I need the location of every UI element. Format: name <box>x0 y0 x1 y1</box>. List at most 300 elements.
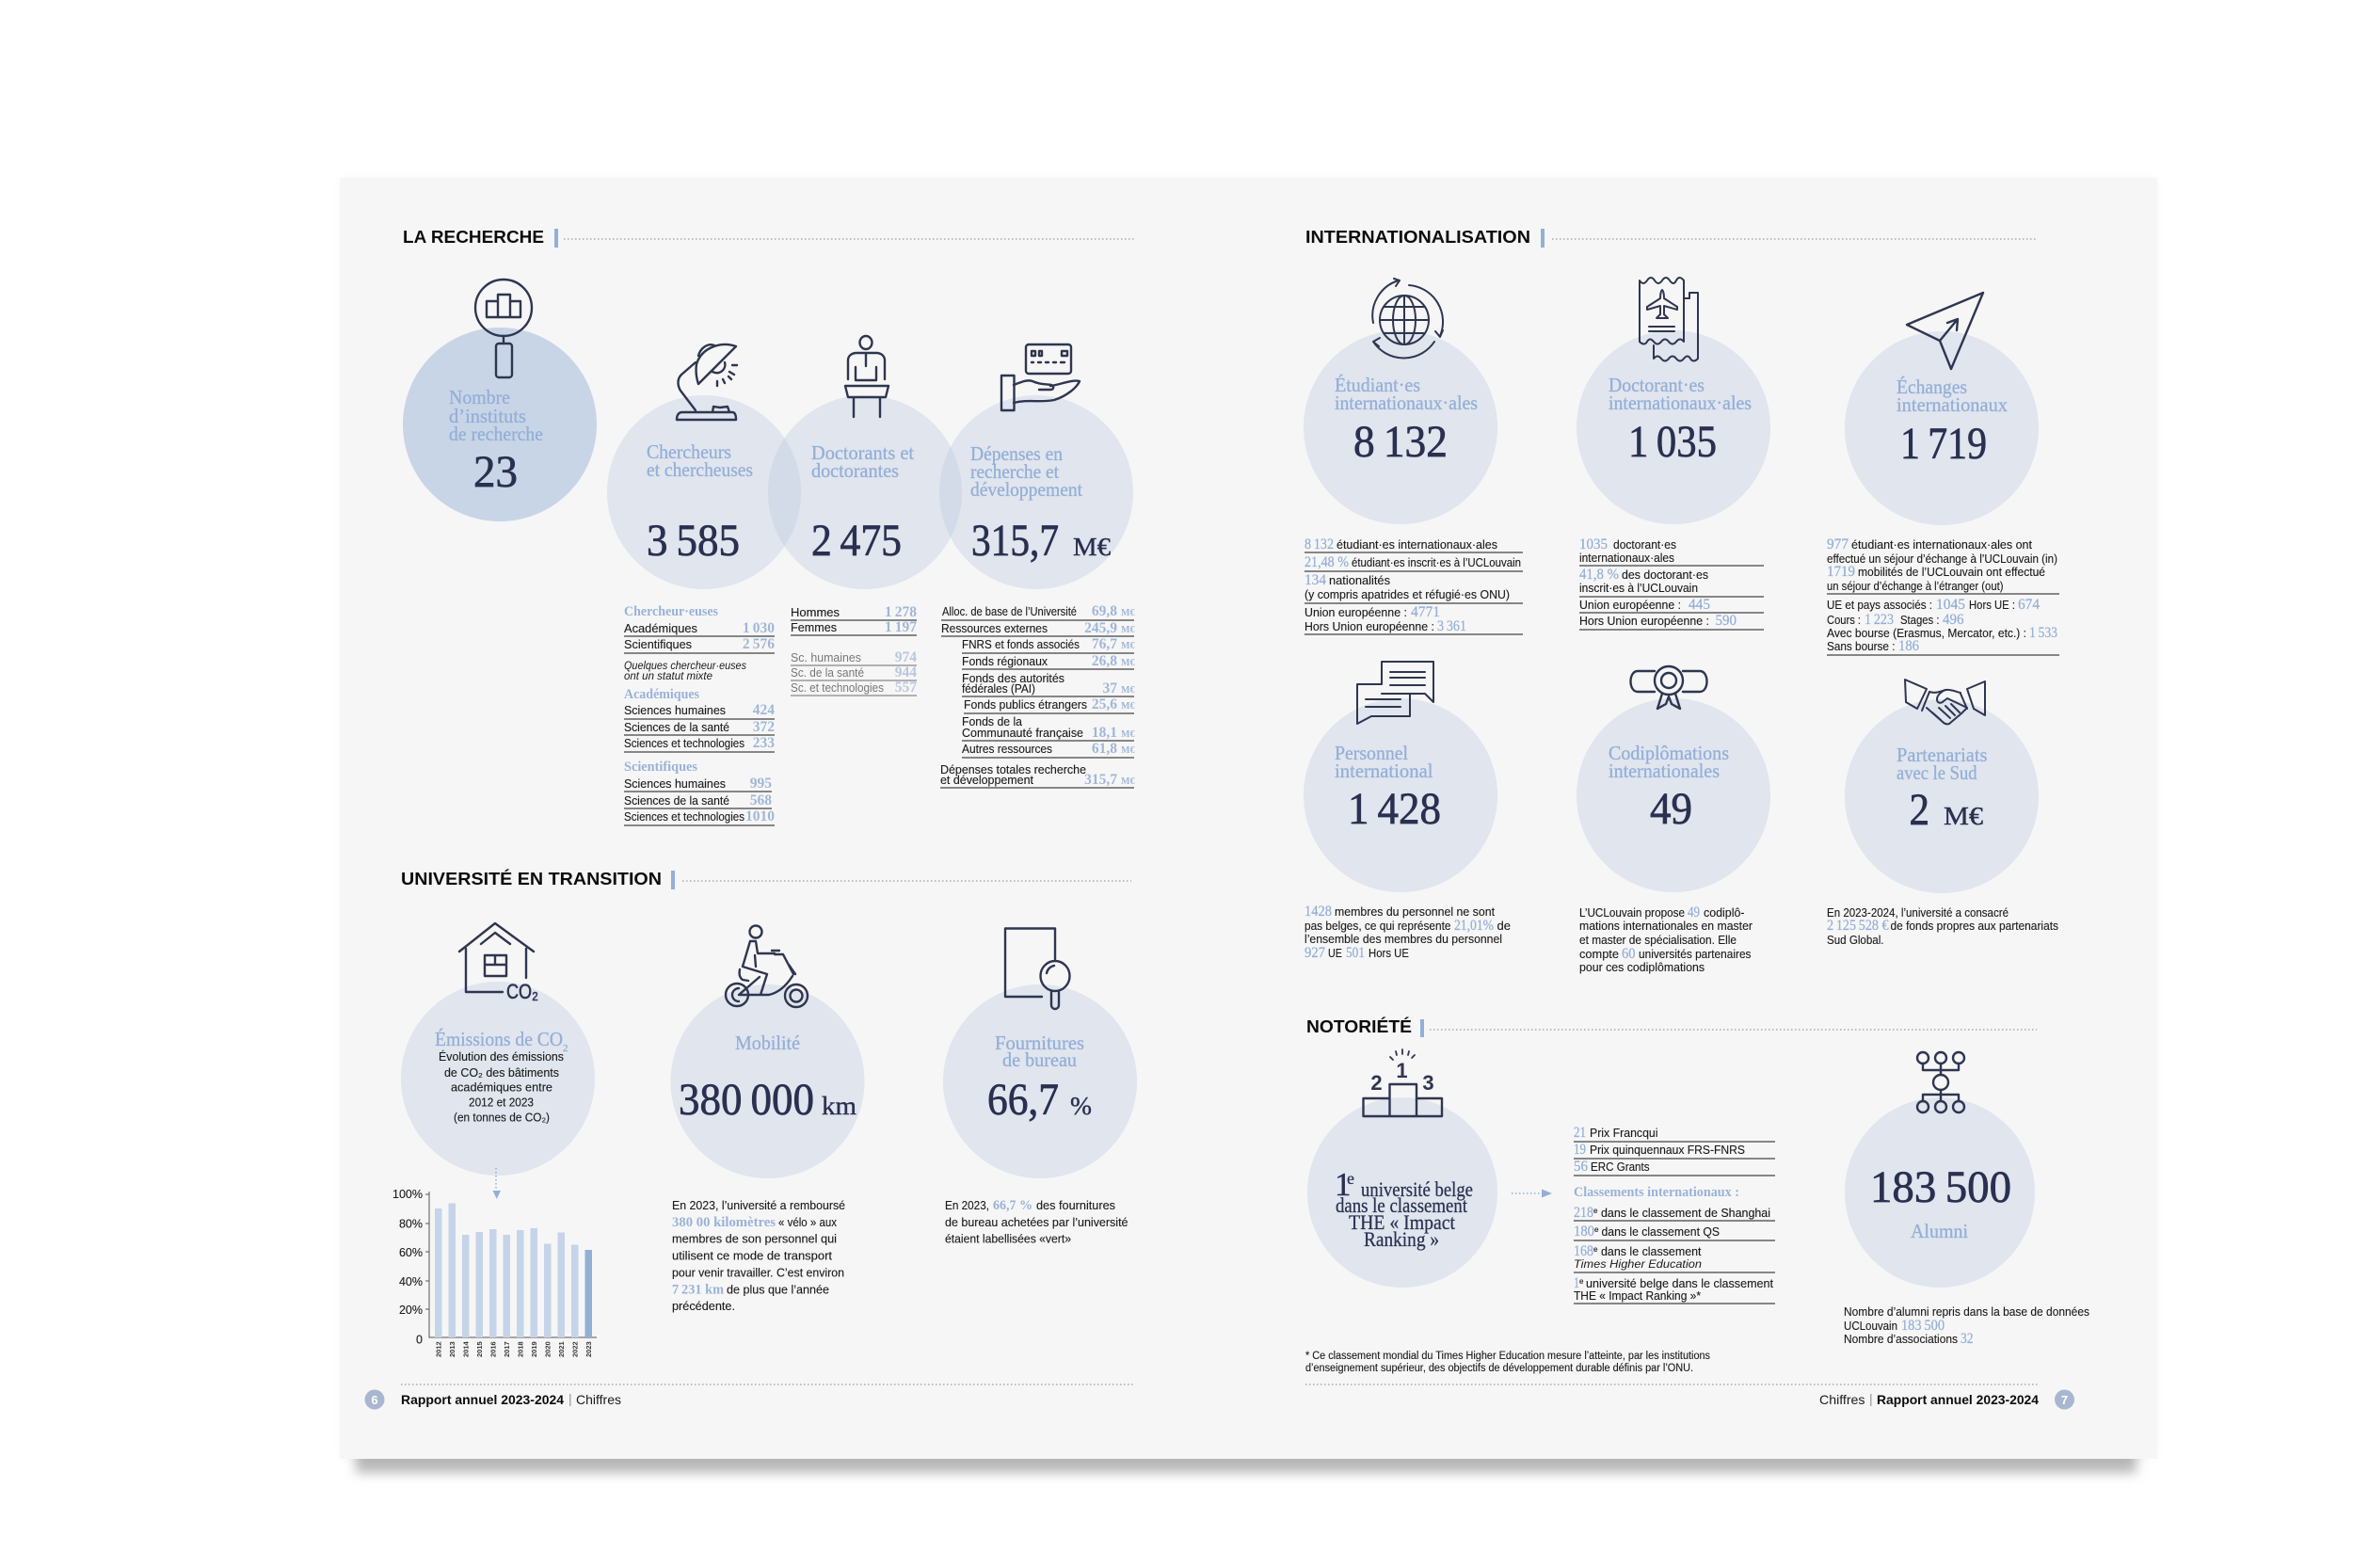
stat circle: fournitures <box>943 984 1137 1178</box>
text: mobilité: pour venir travailler. C’est environ <box>672 1267 844 1280</box>
table: dépenses: et développement <box>940 773 1033 787</box>
stat circle: dépenses: recherche et <box>970 460 1059 483</box>
list: prix et classements: dans le classement QS <box>1602 1225 1720 1239</box>
table: dépenses: Fonds de la <box>962 714 1023 728</box>
stat circle: Impact Ranking: Ranking » <box>1364 1227 1439 1251</box>
table: doctorants: Femmes <box>791 620 837 634</box>
list: étudiant-es internationaux: 134 <box>1305 572 1326 588</box>
list: prix et classements: dans le classement <box>1601 1245 1702 1258</box>
stat circle: doctorant-es internationaux <box>1577 330 1770 524</box>
table: dépenses <box>940 603 1135 788</box>
stat circle: mobilité <box>670 984 864 1178</box>
table: dépenses: Alloc. de base de l’Université <box>942 604 1077 618</box>
table: dépenses: 76,7 <box>1092 636 1117 652</box>
list: échanges: un séjour d’échange à l’étranger (out) <box>1827 580 2003 593</box>
text: codiplômations: codiplô- <box>1704 906 1745 920</box>
text: fournitures: 66,7 % <box>993 1198 1032 1213</box>
table: dépenses: M€ <box>1121 641 1135 651</box>
icon: cyclist <box>726 926 808 1007</box>
table: dépenses: M€ <box>1121 701 1135 712</box>
bar chart: émissions de CO2 2012-2023: 2012 <box>435 1341 442 1357</box>
bar chart: émissions de CO2 2012-2023: 2017 <box>503 1341 511 1357</box>
icon: podium: 3 <box>1422 1071 1434 1095</box>
bar chart: émissions de CO2 2012-2023: 2023 <box>584 1341 593 1357</box>
text: fournitures <box>945 1198 1128 1246</box>
stat circle: émissions de CO2: de CO₂ des bâtiments <box>444 1066 559 1080</box>
list: échanges: effectué un séjour d’échange à l’UCLouvain (in) <box>1827 552 2057 566</box>
stat circle: échanges: 1 719 <box>1900 419 1987 469</box>
list: prix et classements: Prix quinquennaux FRS-FNRS <box>1590 1144 1745 1157</box>
list: doctorant-es internationaux: des doctorant·es <box>1622 568 1708 582</box>
text: alumni: UCLouvain <box>1844 1320 1897 1333</box>
list: étudiant-es internationaux: Union européenne : <box>1305 606 1407 619</box>
icon: diploma scroll <box>1630 666 1707 709</box>
text: mobilité: En 2023, l’université a remboursé <box>672 1199 845 1212</box>
stat circle: mobilité: Mobilité <box>735 1032 800 1054</box>
list: prix et classements: e <box>1594 1225 1599 1234</box>
stat circle: émissions de CO2: 2012 et 2023 <box>469 1096 534 1109</box>
list: prix et classements: Classements internationaux : <box>1574 1185 1739 1200</box>
text: mobilité: 7 231 km <box>672 1282 724 1297</box>
table: doctorants: 974 <box>895 649 917 665</box>
text: alumni: 183 500 <box>1901 1318 1945 1334</box>
table: dépenses: M€ <box>1121 625 1135 635</box>
table: doctorants: 1 197 <box>885 619 917 635</box>
list: prix et classements <box>1574 1125 1775 1304</box>
stat circle: doctorants: 2 475 <box>811 516 902 566</box>
stat circle: émissions de CO2: académiques entre <box>451 1080 552 1094</box>
table: chercheur-euses: 233 <box>753 735 775 751</box>
bar chart: émissions de CO2 2012-2023: 2018 <box>516 1341 525 1357</box>
table: dépenses: Ressources externes <box>941 621 1048 635</box>
table: dépenses: Fonds publics étrangers <box>964 697 1087 712</box>
icon: magnifier with bars <box>475 280 532 377</box>
table: chercheur-euses <box>624 604 775 825</box>
table: dépenses: FNRS et fonds associés <box>962 637 1080 651</box>
stat circle: dépenses <box>939 395 1133 589</box>
list: échanges: 1719 <box>1827 564 1855 580</box>
section: Notoriété <box>1305 1016 2089 1410</box>
stat circle: doctorants: doctorantes <box>811 459 899 482</box>
text: mobilité: « vélo » aux <box>778 1216 838 1229</box>
table: chercheur-euses: 372 <box>753 719 775 735</box>
bar chart: émissions de CO2 2012-2023: 2021 <box>557 1341 566 1357</box>
list: prix et classements: e <box>1579 1277 1584 1286</box>
list: doctorant-es internationaux: 1035 <box>1579 536 1608 552</box>
stat circle: doctorant-es internationaux: Doctorant·es <box>1609 374 1705 396</box>
stat circle: chercheurs: et chercheuses <box>647 458 753 481</box>
list: prix et classements: université belge dans le classement <box>1586 1277 1774 1290</box>
stat circle: émissions de CO2: (en tonnes de CO₂) <box>454 1111 550 1124</box>
list: doctorant-es internationaux: doctorant·es <box>1613 538 1676 552</box>
list: étudiant-es internationaux: nationalités <box>1329 574 1390 587</box>
table: dépenses: M€ <box>1121 608 1135 618</box>
text: codiplômations: L’UCLouvain propose <box>1579 906 1685 920</box>
section: La recherche <box>403 228 1135 825</box>
stat circle: émissions de CO2: 2 <box>563 1043 568 1054</box>
table: chercheur-euses: Sciences humaines <box>624 776 726 791</box>
list: échanges: 674 <box>2018 597 2040 613</box>
stat circle: partenariats: 2 <box>1909 785 1929 835</box>
footer: left page <box>365 1384 1134 1410</box>
stat circle: chercheurs: Chercheurs <box>647 440 731 463</box>
table: chercheur-euses: Académiques <box>624 687 699 702</box>
bar chart: émissions de CO2 2012-2023: 80% <box>399 1218 423 1231</box>
text: personnel international: 501 <box>1346 945 1365 961</box>
table: doctorants: 557 <box>895 680 917 696</box>
text: fournitures: étaient labellisées «vert» <box>945 1233 1071 1246</box>
table: chercheur-euses: Sciences et technologies <box>624 809 744 824</box>
text: personnel international: Hors UE <box>1369 947 1409 960</box>
table: chercheur-euses: 2 576 <box>743 636 775 652</box>
text: personnel international: membres du personnel ne sont <box>1335 905 1496 919</box>
table: dépenses: fédérales (PAI) <box>962 681 1035 696</box>
stat circle: dépenses: développement <box>970 478 1082 501</box>
list: prix et classements: 56 <box>1574 1159 1588 1175</box>
text: codiplômations: mations internationales en master <box>1579 920 1753 933</box>
list: étudiant-es internationaux: 3 361 <box>1437 618 1466 634</box>
footer: right page: Chiffres <box>1819 1392 1865 1407</box>
table: doctorants: 1 278 <box>885 604 917 620</box>
icon: house with CO2 <box>459 923 538 1003</box>
stat circle: instituts de recherche: 23 <box>473 447 518 497</box>
stat circle: instituts de recherche: Nombre <box>449 386 510 408</box>
table: chercheur-euses: 995 <box>750 776 772 792</box>
icon: hand holding card <box>1001 344 1080 410</box>
stat circle: codiplômations: Codiplômations <box>1609 742 1729 764</box>
text: personnel international: 927 <box>1305 945 1325 961</box>
heading: La recherche <box>403 228 1134 248</box>
footer: right page <box>1305 1384 2074 1410</box>
table: dépenses: Fonds régionaux <box>962 654 1048 668</box>
stat circle: étudiant-es internationaux: 8 132 <box>1353 417 1448 467</box>
icon: house with CO2: CO₂ <box>506 980 538 1003</box>
page background <box>340 178 2157 1459</box>
page drop shadow <box>356 1445 2137 1473</box>
text: fournitures: En 2023, <box>945 1199 989 1212</box>
heading: Notoriété: NOTORIÉTÉ <box>1306 1016 1412 1036</box>
bar chart: émissions de CO2 2012-2023: 40% <box>399 1275 423 1288</box>
list: doctorant-es internationaux: internationaux·ales <box>1579 552 1674 565</box>
list: prix et classements: 1 <box>1574 1275 1579 1291</box>
list: prix et classements: THE « Impact Ranking »* <box>1574 1289 1701 1303</box>
heading: Internationalisation: INTERNATIONALISATION <box>1305 228 1530 247</box>
stat circle: mobilité: 380 000 <box>679 1075 814 1125</box>
table: dépenses: 245,9 <box>1084 620 1117 636</box>
stat circle: fournitures: 66,7 <box>987 1075 1059 1125</box>
bar chart: émissions de CO2 2012-2023: 100% <box>392 1188 423 1201</box>
text: partenariats: Sud Global. <box>1827 934 1884 947</box>
footer: right page: Rapport annuel 2023-2024 <box>1877 1392 2039 1407</box>
footnote: * Ce classement mondial du Times Higher Education mesure l’atteinte, par les institutions <box>1305 1351 1710 1362</box>
table: chercheur-euses: 1 030 <box>743 620 775 636</box>
text: codiplômations: 49 <box>1688 904 1700 920</box>
text: alumni: Nombre d’associations <box>1844 1333 1958 1346</box>
table: dépenses: 61,8 <box>1092 741 1117 757</box>
stat circle: alumni: 183 500 <box>1870 1162 2011 1212</box>
stat circle: partenariats: M€ <box>1944 802 1984 830</box>
stat circle: fournitures: % <box>1070 1092 1092 1120</box>
list: échanges: 977 <box>1827 536 1849 552</box>
text: codiplômations: et master de spécialisation. Elle <box>1579 934 1737 947</box>
text: partenariats <box>1827 906 2058 947</box>
icon: podium: 1 <box>1396 1059 1408 1082</box>
icon: speaker at lectern <box>845 336 888 417</box>
stat circle: instituts de recherche: d’instituts <box>449 405 526 427</box>
text: mobilité: de plus que l’année <box>727 1284 829 1297</box>
stat circle: Impact Ranking: université belge <box>1361 1177 1473 1201</box>
list: échanges: Cours : <box>1827 614 1861 627</box>
list: étudiant-es internationaux: étudiant·es internationaux·ales <box>1337 538 1497 552</box>
list: prix et classements: 180 <box>1574 1224 1594 1240</box>
list: prix et classements: 19 <box>1574 1142 1586 1158</box>
text: mobilité: 380 00 kilomètres <box>672 1215 776 1230</box>
section: Université en transition <box>365 869 1137 1410</box>
stat circle: échanges: internationaux <box>1897 393 2008 416</box>
text: personnel international: UE <box>1328 947 1342 960</box>
list: échanges: 1045 <box>1936 597 1965 613</box>
stat circle: codiplômations: 49 <box>1650 784 1692 834</box>
stat circle: partenariats <box>1845 699 2039 893</box>
text: personnel international: de <box>1497 920 1511 933</box>
footer: left page: Rapport annuel 2023-2024 <box>401 1392 564 1407</box>
table: chercheur-euses: Chercheur·euses <box>624 604 718 619</box>
stat circle: étudiant-es internationaux: internationaux·ales <box>1335 392 1478 414</box>
stat circle: Impact Ranking: e <box>1347 1169 1354 1188</box>
table: chercheur-euses: 568 <box>750 792 772 808</box>
icon: handshake <box>1905 680 1985 724</box>
table: dépenses: M€ <box>1121 729 1135 740</box>
bar chart: émissions de CO2 2012-2023: 2022 <box>570 1341 580 1357</box>
stat circle: émissions de CO2: Évolution des émissions <box>439 1049 564 1064</box>
list: échanges <box>1827 536 2059 655</box>
stat circle: instituts de recherche <box>403 328 597 521</box>
icon: podium: 2 <box>1370 1071 1383 1095</box>
list: étudiant-es internationaux <box>1305 536 1523 634</box>
heading: Université en transition <box>401 869 1131 889</box>
table: dépenses: Autres ressources <box>962 742 1052 756</box>
list: échanges: Avec bourse (Erasmus, Mercator, etc.) : <box>1827 627 2026 640</box>
list: doctorant-es internationaux: Hors Union européenne : <box>1579 615 1709 628</box>
text: fournitures: des fournitures <box>1036 1199 1115 1212</box>
table: chercheur-euses: Sciences humaines <box>624 703 726 717</box>
icon: globe with cycle arrows <box>1372 279 1443 358</box>
text: personnel international: 21,01% <box>1454 918 1494 934</box>
list: doctorant-es internationaux: 41,8 % <box>1579 567 1619 583</box>
heading: Notoriété <box>1306 1016 2037 1037</box>
list: échanges: étudiant·es internationaux·ales ont <box>1851 538 2033 552</box>
text: codiplômations: pour ces codiplômations <box>1579 961 1705 974</box>
bar chart: émissions de CO2 2012-2023: 60% <box>399 1246 423 1259</box>
stat circle: instituts de recherche: de recherche <box>449 423 543 445</box>
table: doctorants: Sc. humaines <box>791 650 861 664</box>
table: doctorants <box>791 604 917 696</box>
table: chercheur-euses: Sciences de la santé <box>624 720 729 734</box>
table: dépenses: 315,7 <box>1084 772 1117 788</box>
stat circle: Impact Ranking: THE « Impact <box>1349 1210 1455 1234</box>
bar chart: émissions de CO2 2012-2023: 0 <box>416 1333 423 1346</box>
text: partenariats: En 2023-2024, l’université a consacré <box>1827 906 2009 920</box>
icon: podium <box>1363 1049 1442 1116</box>
text: personnel international: 1428 <box>1305 904 1332 920</box>
list: prix et classements: 218 <box>1574 1205 1593 1221</box>
list: prix et classements: Prix Francqui <box>1590 1127 1658 1140</box>
table: dépenses: M€ <box>1121 745 1135 756</box>
list: échanges: 1 223 <box>1865 612 1894 628</box>
table: dépenses: M€ <box>1121 776 1135 787</box>
table: dépenses: 69,8 <box>1092 603 1117 619</box>
table: doctorants: Sc. de la santé <box>791 665 864 680</box>
stat circle: doctorant-es internationaux: 1 035 <box>1628 417 1717 467</box>
stat circle: alumni: Alumni <box>1911 1220 1968 1242</box>
stat circle: étudiant-es internationaux <box>1304 330 1497 524</box>
stat circle: chercheurs: 3 585 <box>647 516 740 566</box>
stat circle: fournitures: Fournitures <box>995 1032 1084 1054</box>
text: alumni <box>1844 1305 2089 1347</box>
table: chercheur-euses: Scientifiques <box>624 760 697 775</box>
heading: Université en transition: UNIVERSITÉ EN TRANSITION <box>401 869 662 888</box>
list: échanges: Sans bourse : <box>1827 640 1896 653</box>
list: échanges: UE et pays associés : <box>1827 599 1932 612</box>
text: alumni: 32 <box>1961 1331 1973 1347</box>
table: doctorants: Hommes <box>791 605 840 619</box>
table: dépenses: 26,8 <box>1092 653 1117 669</box>
list: doctorant-es internationaux: inscrit·es à l’UCLouvain <box>1579 582 1698 595</box>
stat circle: Impact Ranking: 1 <box>1335 1166 1352 1203</box>
table: doctorants: 944 <box>895 664 917 680</box>
table: chercheur-euses: 424 <box>753 702 775 718</box>
list: échanges: Hors UE : <box>1969 599 2015 612</box>
text: alumni: Nombre d’alumni repris dans la base de données <box>1844 1305 2089 1319</box>
stat circle: doctorants: Doctorants et <box>811 441 914 464</box>
footer: left page: 6 <box>371 1393 378 1407</box>
footnote: d’enseignement supérieur, des objectifs de développement durable définis par l’ONU. <box>1305 1363 1693 1374</box>
stat circle: doctorant-es internationaux: internationaux·ales <box>1609 392 1752 414</box>
stat circle: dépenses: 315,7 <box>971 516 1059 566</box>
section: Internationalisation <box>1304 228 2059 974</box>
list: échanges: Stages : <box>1900 614 1939 627</box>
table: dépenses: Dépenses totales recherche <box>940 762 1086 776</box>
table: chercheur-euses: Académiques <box>624 621 697 635</box>
stat circle: dépenses: Dépenses en <box>970 442 1063 465</box>
icon: paper plane <box>1907 293 1983 369</box>
icon: plane tickets <box>1640 278 1698 361</box>
bar chart: émissions de CO2 2012-2023: 2016 <box>489 1341 497 1357</box>
table: chercheur-euses: Scientifiques <box>624 637 692 651</box>
footer: left page: Chiffres <box>576 1392 621 1407</box>
table: chercheur-euses: Sciences et technologies <box>624 736 744 750</box>
text: personnel international: l’ensemble des membres du personnel <box>1305 933 1502 946</box>
list: prix et classements: ERC Grants <box>1591 1160 1649 1174</box>
table: dépenses: 37 <box>1103 680 1117 696</box>
stat circle: émissions de CO2: Émissions de CO <box>435 1028 563 1050</box>
stat circle: Impact Ranking: dans le classement <box>1336 1193 1467 1217</box>
icon: document and magnifier <box>1005 928 1069 1009</box>
list: prix et classements: e <box>1593 1245 1598 1254</box>
stat circle: personnel international: 1 428 <box>1348 784 1441 834</box>
text: personnel international <box>1305 904 1511 961</box>
footer: right page: 7 <box>2061 1393 2068 1407</box>
list: échanges: mobilités de l’UCLouvain ont effectué <box>1858 566 2045 579</box>
stat circle: partenariats: Partenariats <box>1897 744 1988 766</box>
stat circle: émissions de CO2 <box>401 982 595 1176</box>
stat circle: codiplômations <box>1577 698 1770 892</box>
stat circle: Impact Ranking <box>1307 1097 1497 1288</box>
bar chart: émissions de CO2 2012-2023: 2020 <box>544 1341 552 1357</box>
table: doctorants: Sc. et technologies <box>791 680 884 695</box>
list: étudiant-es internationaux: (y compris apatrides et réfugié·es ONU) <box>1305 588 1510 601</box>
list: étudiant-es internationaux: 4771 <box>1411 604 1440 620</box>
icon: network <box>1917 1052 1964 1112</box>
list: doctorant-es internationaux: Union européenne : <box>1579 599 1681 612</box>
stat circle: échanges: Échanges <box>1897 376 1967 398</box>
list: prix et classements: Times Higher Education <box>1574 1257 1702 1271</box>
list: doctorant-es internationaux: 590 <box>1715 613 1737 629</box>
text: partenariats: de fonds propres aux partenariats <box>1890 920 2058 933</box>
stat circle: doctorants <box>768 395 962 589</box>
text: mobilité: précédente. <box>672 1300 735 1313</box>
list: prix et classements: 21 <box>1574 1125 1586 1141</box>
list: étudiant-es internationaux: étudiant·es inscrit·es à l’UCLouvain <box>1352 556 1521 569</box>
list: prix et classements: 168 <box>1574 1243 1593 1259</box>
table: dépenses: Communauté française <box>962 726 1083 740</box>
stat circle: chercheurs <box>607 395 801 589</box>
stat circle: personnel international: Personnel <box>1335 742 1408 764</box>
text: personnel international: pas belges, ce qui représente <box>1305 920 1451 933</box>
arrow: to list <box>1512 1190 1552 1197</box>
text: codiplômations <box>1579 904 1753 974</box>
stat circle: personnel international: international <box>1335 760 1433 782</box>
bar chart: émissions de CO2 2012-2023: 20% <box>399 1304 423 1317</box>
icon: desk lamp <box>677 344 737 420</box>
list: prix et classements: e <box>1593 1207 1598 1215</box>
footnote <box>1305 1351 1710 1374</box>
table: chercheur-euses: Sciences de la santé <box>624 793 729 808</box>
list: étudiant-es internationaux: Hors Union européenne : <box>1305 620 1434 633</box>
stat circle: partenariats: avec le Sud <box>1897 761 1977 784</box>
list: doctorant-es internationaux: 445 <box>1689 597 1710 613</box>
stat circle: alumni <box>1845 1097 2035 1288</box>
stat circle: étudiant-es internationaux: Étudiant·es <box>1335 374 1420 396</box>
bar chart: émissions de CO2 2012-2023: 2013 <box>448 1341 456 1357</box>
bar chart: émissions de CO2 2012-2023: 2019 <box>530 1341 538 1357</box>
stat circle: codiplômations: internationales <box>1609 760 1720 782</box>
table: dépenses: 18,1 <box>1092 725 1117 741</box>
heading: La recherche: LA RECHERCHE <box>403 228 544 247</box>
list: échanges: 186 <box>1898 638 1919 654</box>
text: codiplômations: compte <box>1579 948 1619 961</box>
icon: chat bubbles <box>1357 662 1433 724</box>
arrow: to chart <box>493 1168 501 1199</box>
table: dépenses: Fonds des autorités <box>962 671 1064 685</box>
list: doctorant-es internationaux <box>1579 536 1764 630</box>
list: étudiant-es internationaux: 8 132 <box>1305 536 1334 552</box>
stat circle: fournitures: de bureau <box>1002 1048 1077 1071</box>
list: prix et classements: dans le classement de Shanghai <box>1601 1207 1770 1220</box>
table: chercheur-euses: Quelques chercheur·euses <box>624 659 746 672</box>
list: étudiant-es internationaux: 21,48 % <box>1305 554 1349 570</box>
text: codiplômations: universités partenaires <box>1639 948 1751 961</box>
heading: Internationalisation <box>1305 228 2038 248</box>
stat circle: personnel international <box>1304 698 1497 892</box>
table: dépenses: M€ <box>1121 658 1135 668</box>
list: échanges: 496 <box>1943 612 1963 628</box>
table: chercheur-euses: 1010 <box>745 808 775 824</box>
text: partenariats: 2 125 528 € <box>1827 918 1888 934</box>
text: codiplômations: 60 <box>1622 946 1636 962</box>
table: dépenses: 25,6 <box>1092 696 1117 712</box>
text: mobilité <box>672 1199 845 1313</box>
